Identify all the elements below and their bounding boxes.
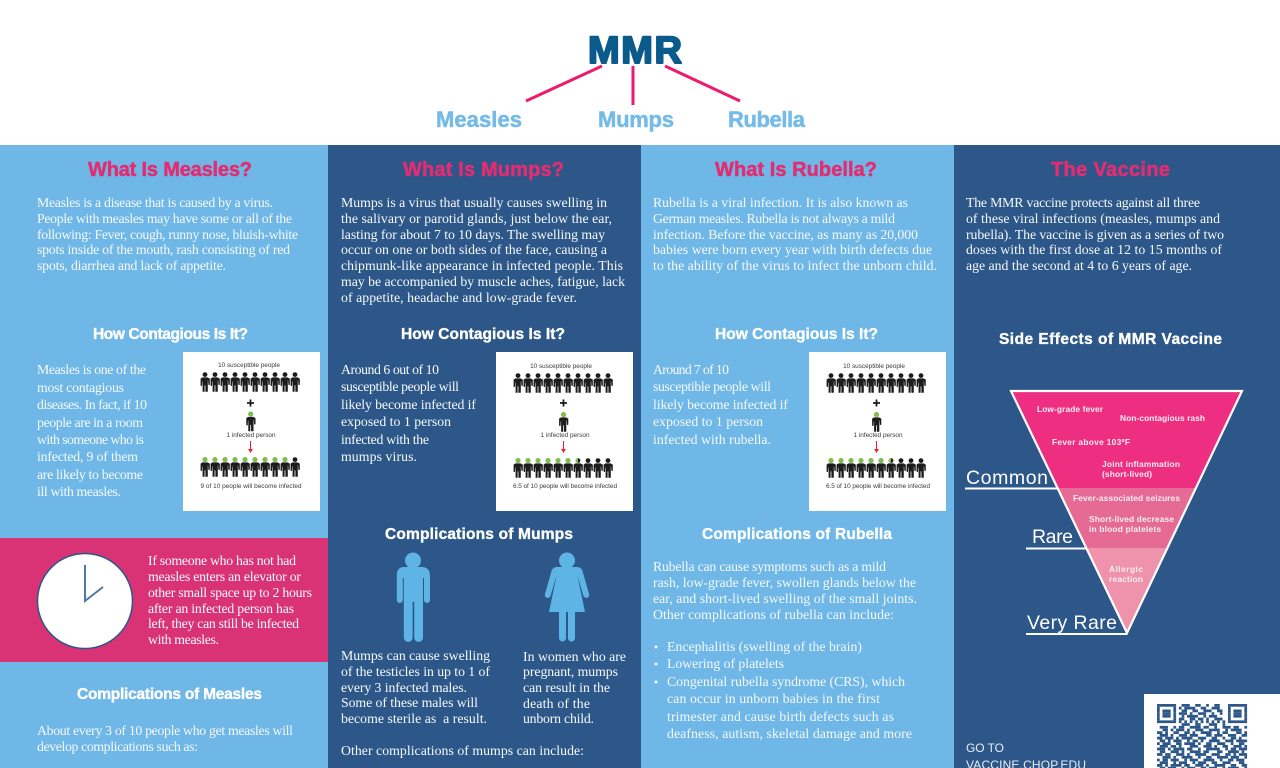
label: very rare: Very Rare	[1027, 612, 1117, 634]
text: contagion: ill with measles.	[37, 484, 121, 499]
diagram: measles contagion: 9 of 10 people will become infected	[200, 483, 302, 490]
list: rubella complications: Lowering of platelets	[667, 656, 784, 671]
heading: how contagious: How Contagious Is It?	[715, 326, 878, 343]
heading: complications of rubella: Complications of Rubella	[702, 526, 892, 543]
text: measles description: following: Fever, cough, runny nose, bluish-white	[37, 227, 298, 242]
diagram: rubella contagion: 6.5 of 10 people will become infected	[826, 483, 930, 490]
text: rubella description: to the ability of the virus to infect the unborn child.	[653, 258, 937, 273]
text: common effects: Joint inflammation	[1102, 459, 1180, 469]
text: rubella description: German measles. Rubella is not always a mild	[653, 211, 895, 226]
text: contagion	[37, 362, 147, 499]
list: rubella complications: trimester and cause birth defects such as	[667, 709, 894, 724]
text: contagion	[341, 362, 476, 464]
diagram: mumps contagion: 6.5 of 10 people will become infected	[513, 483, 617, 490]
text: common effects	[1037, 404, 1205, 479]
text: contagion: likely become infected if	[341, 397, 476, 412]
text: contagion: susceptible people will	[653, 379, 771, 394]
text: pregnancy complications: death of the	[523, 696, 590, 711]
text: vaccine description: doses with the first dose at 12 to 15 months of	[966, 242, 1222, 257]
text: rubella complications: Rubella can cause symptoms such as a mild	[653, 559, 886, 574]
text: common effects: Fever above 103ºF	[1052, 437, 1130, 447]
text: vaccine description: The MMR vaccine protects against all three	[966, 195, 1200, 210]
text: contagion: exposed to 1 person	[653, 414, 763, 429]
text: common effects: Non-contagious rash	[1120, 413, 1205, 423]
text: contagion	[653, 362, 788, 447]
qr code	[1144, 694, 1280, 768]
text: pregnancy complications: In women who are	[523, 649, 626, 664]
text: rare effects	[1073, 493, 1180, 534]
text: complications of measles	[37, 723, 293, 754]
text: mumps description: lasting for about 7 to 10 days. The swelling may	[341, 227, 605, 242]
header	[436, 30, 806, 132]
chart: side effects inverted pyramid	[965, 390, 1243, 634]
text: complications of measles: About every 3 of 10 people who get measles will	[37, 723, 293, 738]
list: rubella complications: Encephalitis (swelling of the brain)	[667, 639, 862, 655]
text: pregnancy complications: pregnant, mumps	[523, 664, 618, 679]
text: contagion: exposed to 1 person	[341, 414, 451, 429]
text: callout: with measles.	[148, 632, 219, 647]
text: contagion: are likely to become	[37, 467, 143, 482]
text: contagion: Around 7 of 10	[653, 362, 729, 377]
heading: what is mumps: What Is Mumps?	[403, 159, 564, 181]
diagram: mumps contagion	[496, 352, 633, 511]
list: rubella complications: deafness, autism, skeletal damage and more	[667, 726, 912, 741]
text: vaccine description: rubella). The vaccine is given as a series of two	[966, 227, 1224, 243]
text: vaccine description: of these viral infections (measles, mumps and	[966, 211, 1220, 227]
text: measles description: People with measles may have some or all of the	[37, 211, 292, 226]
diagram: measles contagion: 10 susceptible people	[218, 362, 280, 369]
text: contagion: with someone who is	[37, 432, 144, 447]
text: common effects: Low-grade fever	[1037, 404, 1104, 414]
text: testicular complications	[341, 648, 490, 726]
text: rare effects: Fever-associated seizures	[1073, 493, 1180, 503]
text: contagion: susceptible people will	[341, 379, 459, 394]
text: contagion: infected, 9 of them	[37, 449, 138, 464]
text: vaccine description: age and the second at 4 to 6 years of age.	[966, 258, 1192, 273]
text: contagion: diseases. In fact, if 10	[37, 397, 147, 412]
text: very rare effects: Allergic	[1109, 564, 1143, 574]
text: measles description: spots, diarrhea and lack of appetite.	[37, 258, 226, 273]
text: callout: other small space up to 2 hours	[148, 585, 312, 600]
diagram: rubella contagion: 1 infected person	[853, 432, 903, 439]
text: testicular complications: Mumps can cause swelling	[341, 648, 490, 663]
list: rubella complications: Congenital rubella syndrome (CRS), which	[667, 674, 905, 690]
text: website link	[966, 741, 1086, 768]
heading: what is measles: What Is Measles?	[88, 159, 252, 181]
text: rare effects: Short-lived decrease	[1089, 514, 1174, 524]
callout: two hours	[0, 538, 328, 662]
text: testicular complications: every 3 infected males.	[341, 680, 467, 695]
diagram: mumps contagion: 10 susceptible people	[530, 363, 592, 370]
icon: woman	[545, 552, 589, 642]
text: measles description: Measles is a disease that is caused by a virus.	[37, 195, 273, 210]
diagram: measles contagion: 1 infected person	[226, 432, 276, 439]
text: contagion: Measles is one of the	[37, 362, 146, 377]
text: mumps description: Mumps is a virus that usually causes swelling in	[341, 195, 607, 210]
text: contagion: likely become infected if	[653, 397, 788, 412]
text: rare effects: in blood platelets	[1089, 524, 1161, 534]
heading: complications of measles: Complications of Measles	[77, 686, 262, 703]
text: contagion: mumps virus.	[341, 449, 417, 464]
label: common: Common	[966, 467, 1048, 489]
text: mumps description	[341, 195, 625, 305]
text: testicular complications: become sterile as a result.	[341, 711, 487, 726]
text: rubella description	[653, 195, 937, 273]
text: mumps description: chipmunk-like appearance in infected people. This	[341, 258, 623, 273]
diagram: measles contagion	[183, 352, 320, 511]
list: rubella complications	[654, 639, 912, 741]
text: pregnancy complications: unborn child.	[523, 711, 594, 726]
text: mumps description: may be accompanied by muscle aches, fatigue, lack	[341, 274, 625, 289]
text: callout: left, they can still be infected	[148, 616, 299, 631]
panel: measles	[0, 145, 328, 768]
text: complications of measles: develop complications such as:	[37, 739, 198, 754]
text: rubella complications: rash, low-grade fever, swollen glands below the	[653, 575, 916, 590]
text: contagion: people are in a room	[37, 415, 143, 430]
list: rubella complications: can occur in unborn babies in the first	[667, 691, 880, 706]
text: mumps description: the salivary or parotid glands, just below the ear,	[341, 211, 612, 226]
text: contagion: Around 6 out of 10	[341, 362, 439, 377]
text: rubella description: infection. Before the vaccine, as many as 20,000	[653, 227, 918, 242]
text: website link: GO TO	[966, 741, 1004, 755]
text: contagion: infected with the	[341, 432, 429, 447]
text: mumps description: occur on one or both sides of the face, causing a	[341, 242, 607, 257]
text: callout: measles enters an elevator or	[148, 569, 301, 584]
heading: side effects: Side Effects of MMR Vaccine	[999, 331, 1222, 348]
text: vaccine description	[966, 195, 1224, 273]
icon: man	[397, 552, 430, 642]
heading: how contagious: How Contagious Is It?	[401, 326, 565, 343]
diagram: rubella contagion	[809, 352, 946, 511]
label: Rubella: Rubella	[728, 107, 806, 132]
text: rubella description: babies were born every year with birth defects due	[653, 242, 932, 257]
connector lines	[526, 66, 740, 105]
text: pregnancy complications	[523, 649, 626, 726]
text: callout: after an infected person has	[148, 601, 294, 616]
text: very rare effects	[1109, 564, 1143, 584]
text: contagion: infected with rubella.	[653, 432, 771, 447]
label: Mumps: Mumps	[598, 107, 674, 132]
text: testicular complications: of the testicles in up to 1 of	[341, 664, 490, 679]
text: rubella description: Rubella is a viral infection. It is also known as	[653, 195, 908, 210]
panel: vaccine	[954, 145, 1280, 768]
heading: complications of mumps: Complications of Mumps	[385, 526, 573, 543]
text: very rare effects: reaction	[1109, 574, 1143, 584]
text: rubella complications	[653, 559, 917, 622]
heading: what is rubella: What Is Rubella?	[715, 159, 877, 181]
text: common effects: (short-lived)	[1102, 469, 1152, 479]
text: other complications: Other complications of mumps can include:	[341, 743, 584, 758]
text: rubella complications: Other complications of rubella can include:	[653, 607, 894, 622]
text: pregnancy complications: can result in the	[523, 680, 610, 695]
text: measles description	[37, 195, 298, 273]
label: rare: Rare	[1032, 526, 1073, 548]
heading: how contagious: How Contagious Is It?	[93, 326, 248, 343]
text: callout	[148, 553, 312, 647]
text: measles description: spots inside of the mouth, rash consisting of red	[37, 242, 290, 257]
icon: clock	[38, 554, 132, 648]
title: MMR: MMR	[588, 30, 682, 72]
text: rubella complications: ear, and short-lived swelling of the small joints.	[653, 591, 917, 606]
heading: the vaccine: The Vaccine	[1051, 159, 1170, 181]
diagram: rubella contagion: 10 susceptible people	[843, 363, 905, 370]
panel: rubella	[641, 145, 954, 768]
text: testicular complications: Some of these males will	[341, 695, 478, 710]
text: mumps description: of appetite, headache and low-grade fever.	[341, 290, 577, 305]
label: Measles: Measles	[436, 107, 522, 132]
text: contagion: most contagious	[37, 380, 124, 395]
panel: mumps	[328, 145, 641, 768]
text: callout: If someone who has not had	[148, 553, 296, 568]
diagram: mumps contagion: 1 infected person	[540, 432, 590, 439]
